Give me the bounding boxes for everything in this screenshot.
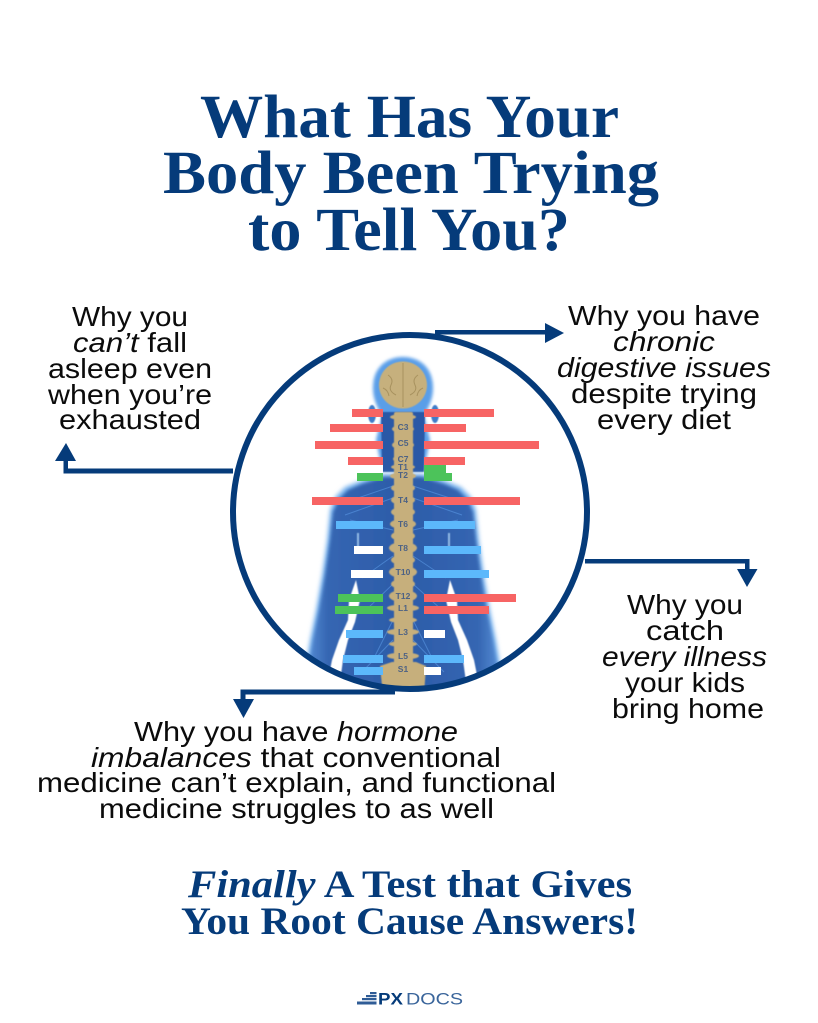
vertebra labels: C3	[398, 422, 409, 432]
text: illness	[602, 589, 767, 724]
body silhouette fill	[308, 474, 498, 686]
text: digestive issues: despite trying	[571, 378, 757, 409]
vertebra labels: T1	[398, 462, 408, 472]
text: hormone imbalances	[37, 716, 556, 824]
text: hormone imbalances: Why you have hormone	[134, 716, 458, 747]
text: trouble sleeping: Why you	[72, 301, 188, 332]
vertebra labels: T8	[398, 543, 408, 553]
text: digestive issues: digestive issues	[557, 352, 771, 383]
sacrum	[379, 661, 427, 686]
neck	[381, 412, 425, 472]
arrow: right	[585, 559, 758, 587]
closing headline: Finally A Test that Gives	[187, 863, 632, 906]
light side highlights	[356, 532, 450, 546]
text: trouble sleeping: can’t fall	[73, 327, 187, 358]
text: hormone imbalances: medicine struggles to as well	[99, 793, 494, 824]
logo: PX DOCS: PX	[378, 990, 404, 1008]
text: trouble sleeping: exhausted	[59, 404, 201, 435]
arrow: left	[55, 443, 233, 474]
head halo	[373, 357, 433, 470]
title: to Tell You?	[248, 197, 570, 264]
title	[163, 84, 659, 264]
body silhouette glow	[305, 472, 502, 664]
text: trouble sleeping: when you’re	[47, 379, 212, 410]
vertebra labels: L1	[398, 603, 408, 613]
right result bars	[424, 409, 539, 675]
vertebra labels: T10	[396, 567, 411, 577]
infographic canvas	[39, 94, 770, 1004]
text: illness: your kids	[625, 667, 745, 698]
vertebra labels: C7	[398, 454, 409, 464]
arrow: top right	[435, 323, 564, 343]
spinal column	[394, 412, 413, 692]
vertebra labels: S1	[398, 664, 408, 674]
body and spine illustration	[300, 357, 506, 705]
closing headline: You Root Cause Answers!	[181, 900, 638, 943]
vertebra labels: L3	[398, 627, 408, 637]
text: illness: catch	[646, 615, 724, 646]
vertebra labels: C5	[398, 438, 409, 448]
text: hormone imbalances: imbalances that conventional	[91, 742, 501, 773]
text: digestive issues: Why you have	[568, 300, 760, 331]
logo: PX DOCS: DOCS	[406, 990, 463, 1008]
vertebra labels	[396, 422, 411, 674]
left result bars	[312, 409, 383, 675]
text: trouble sleeping	[47, 301, 212, 435]
vertebra labels: L5	[398, 651, 408, 661]
text: illness: bring home	[612, 693, 764, 724]
text: illness: Why you	[627, 589, 743, 620]
text: digestive issues: chronic	[613, 326, 715, 357]
brain	[379, 362, 427, 408]
arrow: bottom	[233, 690, 395, 718]
text: trouble sleeping: asleep even	[48, 353, 212, 384]
text: digestive issues	[557, 300, 771, 435]
spine	[380, 412, 426, 695]
text: digestive issues: every diet	[597, 404, 731, 435]
ears	[368, 405, 439, 423]
text: hormone imbalances: medicine can’t explain, and functional	[37, 767, 556, 798]
title: What Has Your	[200, 84, 619, 151]
circle ring	[233, 335, 587, 689]
nerve branches	[345, 486, 462, 672]
text: illness: every illness	[602, 641, 767, 672]
title: Body Been Trying	[163, 140, 659, 207]
vertebra labels: T6	[398, 519, 408, 529]
closing headline	[181, 863, 638, 943]
vertebrae	[387, 414, 419, 660]
logo: PX DOCS	[357, 990, 463, 1008]
vertebra labels: T4	[398, 495, 408, 505]
vertebra labels: T2	[398, 470, 408, 480]
gaps between arms and torso	[330, 580, 478, 677]
vertebra labels: T12	[396, 591, 411, 601]
